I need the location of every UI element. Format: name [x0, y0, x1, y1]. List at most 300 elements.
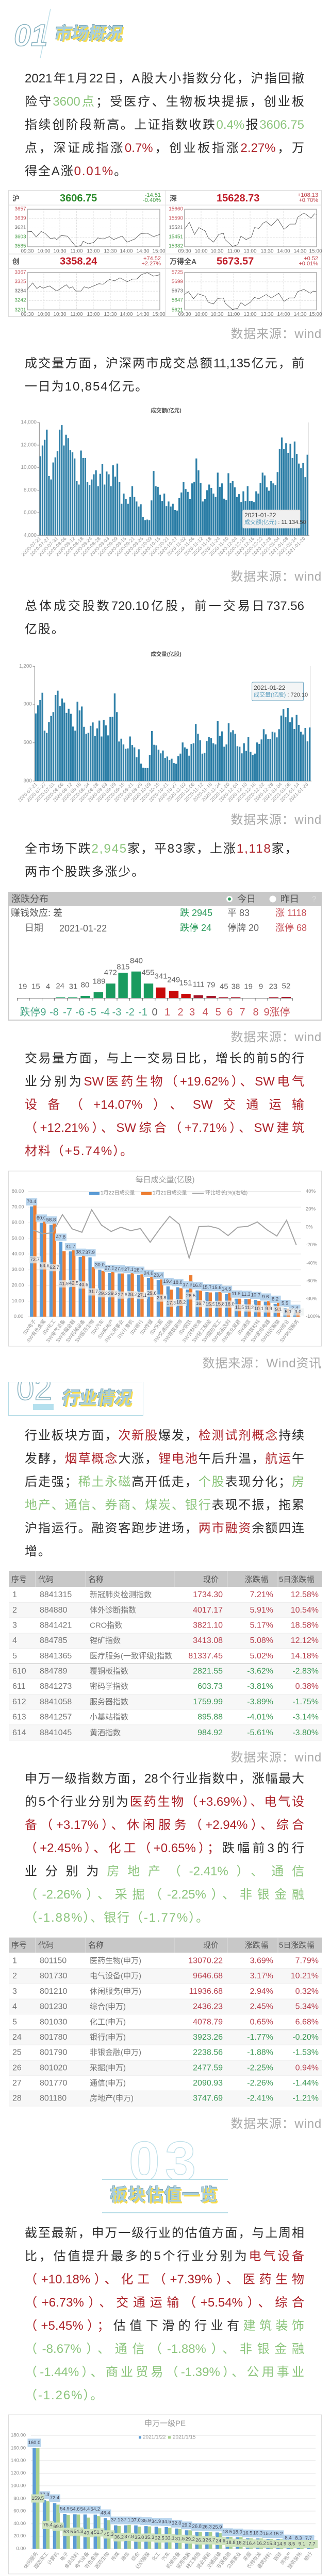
header: 深: 深	[170, 194, 177, 202]
source note: 数据来源：wind	[230, 327, 322, 341]
rows: 610	[12, 1667, 26, 1675]
category labels: 医药生物	[93, 2551, 111, 2570]
rows: 5.17%	[250, 1621, 273, 1630]
data labels: Jan 22: 58.8	[46, 1217, 56, 1223]
table header: 序号	[11, 1575, 27, 1584]
rows: 2477.59	[193, 2064, 223, 2072]
category labels: 综合	[130, 2551, 141, 2562]
histogram value labels: 79	[207, 981, 215, 989]
data labels: 2021/1/15: 26.3	[195, 2537, 205, 2543]
category labels: 机械设备	[164, 2551, 182, 2570]
chart: 沪 intraday: 11:00	[70, 248, 83, 255]
data labels: Jan 21: 31.7	[89, 1289, 98, 1295]
histogram value labels: 151	[179, 979, 192, 987]
data labels: Jan 21: 27.1	[137, 1293, 147, 1298]
table header: 序号	[11, 1941, 27, 1950]
category labels: SW国防军工	[201, 1318, 223, 1344]
category labels: SW采掘	[148, 1318, 164, 1336]
rows	[12, 1590, 319, 1737]
paragraph: market overview: 点，深证成指涨0.7%，创业板指涨2.27%，万	[25, 141, 304, 155]
paragraph: volume by sector: 交易量方面，与上一交易日比，增长的前5的行	[25, 1051, 304, 1065]
data labels: Jan 21: 11.5	[235, 1305, 244, 1311]
rows: 房地产(申万)	[90, 2094, 134, 2103]
rows: 801020	[40, 2064, 67, 2072]
table header: 代码	[38, 1941, 54, 1950]
date axis labels: 2021-01-20	[285, 536, 307, 557]
rows: 8841058	[40, 1698, 72, 1706]
y axis: 600	[23, 740, 32, 745]
table header: 名称	[88, 1941, 104, 1950]
header: 万得全A: +0.01%	[299, 261, 318, 267]
chart: 深 intraday: 15660	[169, 206, 183, 212]
rows: 611	[12, 1682, 26, 1691]
rows: 801730	[40, 1972, 67, 1980]
rows: 3923.26	[193, 2033, 223, 2042]
data labels: Jan 21: 3.0	[294, 1309, 302, 1315]
chart: 深 intraday: 15590	[169, 215, 183, 222]
bars	[40, 425, 307, 535]
rows: 8841365	[40, 1652, 72, 1660]
category labels: 通信	[120, 2551, 130, 2562]
histogram value labels: 52	[282, 982, 290, 990]
category labels: 建筑装饰	[286, 2551, 303, 2570]
category labels: 电气设备	[73, 2551, 91, 2570]
category labels: 家用电器	[175, 2551, 192, 2570]
histogram value labels: 45	[220, 982, 228, 991]
category labels: SW交通运输	[152, 1318, 174, 1344]
paragraph: share volume: 总体成交股数720.10亿股，前一交易日737.56	[25, 599, 304, 613]
header bar: ?	[312, 894, 316, 904]
rows: 4017.17	[193, 1606, 223, 1615]
header: 沪	[12, 192, 161, 204]
rows: 7.21%	[250, 1590, 273, 1599]
rows: 1734.30	[193, 1590, 223, 1599]
table header: 代码	[38, 1575, 54, 1584]
date axis labels: 2020-10-21	[148, 536, 170, 557]
chart: 万得全A intraday: 5673	[172, 289, 183, 294]
summary stats: 日期	[25, 923, 43, 933]
category labels: SW银行	[129, 1318, 145, 1336]
y axis: 14,000	[21, 419, 37, 426]
chart: 万得全A intraday: 5725	[172, 270, 183, 275]
chart: 沪 intraday: 13:30	[104, 248, 117, 255]
chart: SW level-1 PE	[8, 2414, 322, 2574]
header bar: 今日	[237, 894, 256, 904]
source note: 数据来源：wind	[230, 2117, 322, 2131]
chart title: 成交量(亿股)	[151, 651, 182, 657]
chart: 创 intraday: 3325	[14, 279, 26, 284]
date axis labels: 2020-10-15	[140, 536, 162, 557]
histogram value labels: 19	[244, 982, 253, 991]
rows: 613	[12, 1713, 26, 1722]
rows: 0.32%	[295, 1987, 319, 1996]
table: SW level-1 ranking	[9, 1937, 322, 2106]
rows: 0.38%	[295, 1682, 319, 1691]
rows: -1.44%	[292, 2079, 319, 2088]
category labels: SW非银金融	[55, 1318, 77, 1344]
histogram value labels	[19, 956, 290, 991]
data labels: 2021/1/22: 37.1	[111, 2517, 120, 2523]
data labels: Jan 22: 10.7	[251, 1293, 260, 1298]
category labels: 休闲服务	[22, 2551, 40, 2570]
date axis labels: 2020-12-16	[234, 536, 256, 557]
rows: 黄酒指数	[90, 1728, 121, 1737]
paragraph: valuation: （-1.44%）、商业贸易（-1.39%）、公用事业	[25, 2365, 304, 2379]
data labels: Jan 21: 9.9	[266, 1306, 272, 1312]
rows: -2.83%	[292, 1667, 319, 1675]
category labels: SW医药生物	[74, 1318, 96, 1344]
paragraph: turnover: 成交量方面，沪深两市成交总额11,135亿元，前	[25, 357, 304, 370]
paragraph: SW level-1 index	[25, 1771, 304, 1925]
date axis labels: 2020-12-22	[242, 536, 264, 557]
growth line	[33, 1210, 296, 1258]
date axis labels: 2020-11-02	[166, 536, 187, 557]
category labels: SW传媒	[139, 1318, 155, 1336]
rows: 采掘(申万)	[90, 2064, 126, 2072]
data labels: Jan 21: 15.8	[215, 1301, 225, 1307]
data labels: Jan 21: 29.6	[147, 1291, 157, 1296]
table header	[9, 1571, 322, 1587]
date axis labels: 2020-08-12	[52, 782, 74, 803]
rows: 5.02%	[250, 1652, 273, 1660]
date axis labels: 2020-11-02	[166, 782, 187, 803]
rows: 综合(申万)	[90, 2002, 126, 2011]
chart: 沪 intraday: 14:00	[120, 248, 133, 255]
chart: turnover bars	[21, 407, 309, 557]
data labels: Jan 21: 16.7	[196, 1301, 205, 1307]
category labels: 钢铁	[272, 2551, 284, 2562]
category labels: 食品饮料	[63, 2551, 80, 2570]
rows: 锂矿指数	[90, 1636, 121, 1645]
gridlines and axis: 180.00	[11, 2433, 26, 2438]
date axis labels: 2020-09-15	[104, 782, 126, 803]
data labels: Jan 21: 23.8	[157, 1295, 167, 1301]
rows: 密码学指数	[90, 1682, 128, 1691]
summary stats: 赚钱效应: 差	[11, 908, 62, 918]
rows: 13070.22	[188, 1957, 223, 1965]
rows: 非银金融(申万)	[90, 2048, 141, 2057]
chart: 深 intraday: 15382	[169, 243, 183, 249]
chart: 沪 intraday: 3585	[14, 243, 26, 249]
data labels: Jan 21: 27.6	[118, 1292, 127, 1298]
data labels: 2021/1/15	[31, 2495, 318, 2548]
histogram value labels: 815	[117, 962, 129, 972]
paragraph: valuation: （-8.67%）、通信（-1.88%）、非银金融	[25, 2342, 304, 2355]
chart: 万得全A intraday: 5699	[172, 279, 183, 284]
date axis labels: 2020-11-18	[191, 536, 213, 557]
data labels: 2021/1/22: 54.2	[91, 2506, 100, 2512]
date axis labels: 2020-07-21	[21, 536, 42, 557]
chart: 创 intraday: 3367	[14, 270, 26, 275]
date axis labels: 2020-11-30	[209, 782, 231, 803]
data labels: 2021/1/15: 7.7	[308, 2541, 316, 2547]
data labels: 2021/1/22: 16.3	[253, 2531, 262, 2536]
rows: -0.20%	[292, 2033, 319, 2042]
data labels: 2021/1/15: 49.4	[84, 2530, 93, 2536]
data labels: 2021/1/22: 54.9	[60, 2506, 70, 2512]
paragraph: SW level-1 index: （-1.88%）、银行（-1.77%）。	[25, 1910, 209, 1925]
chart: 沪 intraday: 15:00	[152, 248, 166, 255]
table header	[9, 1938, 322, 1953]
histogram value labels: 189	[92, 977, 106, 986]
date axis labels: 2020-11-12	[183, 782, 205, 803]
rows: 26	[12, 2064, 22, 2072]
category labels: SW建筑材料	[240, 1318, 262, 1344]
category labels: 房地产	[279, 2551, 293, 2566]
pointer line	[308, 422, 309, 535]
data labels: 2021/1/15: 9.1	[299, 2541, 305, 2547]
date axis labels: 2020-11-24	[201, 782, 222, 803]
table header: 涨跌幅	[245, 1941, 268, 1950]
category labels: SW钢铁	[177, 1318, 193, 1336]
date axis labels: 2020-10-27	[157, 782, 178, 803]
rows: 27	[12, 2079, 22, 2088]
data labels: 2021/1/22: 26.3	[202, 2524, 212, 2530]
legend: 2021/1/15	[173, 2435, 196, 2440]
data labels: 2021/1/15: 15.3	[267, 2541, 276, 2547]
paragraph: sector overview: 地产、通信、券商、煤炭、银行表现不振，拖累	[25, 1498, 304, 1512]
paragraph: valuation	[25, 2226, 304, 2402]
category labels: 公用事业	[225, 2551, 242, 2570]
histogram bars	[18, 972, 292, 1001]
category labels: SW公用事业	[103, 1318, 125, 1344]
chart: 创 intraday: 10:30	[53, 312, 67, 317]
data labels: 2021/1/22: 160.0	[28, 2440, 40, 2446]
header: 沪: -0.40%	[143, 197, 161, 204]
date axis labels: 2020-08-28	[80, 536, 102, 557]
legend: 环比增长(%)(右轴)	[205, 1189, 248, 1196]
paragraph: market overview: 险守3600点；受医疗、生物板块提振，创业板	[25, 95, 304, 108]
histogram axis labels: -2	[125, 1007, 135, 1018]
paragraph: market overview	[25, 71, 304, 178]
gridlines and axes: -80%	[306, 1296, 318, 1301]
paragraph: SW level-1 index: （+2.45%）、化工（+0.65%）；跌幅前3的行	[25, 1841, 304, 1855]
data labels: 2021/1/15: 45.3	[104, 2532, 113, 2537]
rows: 12.58%	[291, 1590, 319, 1599]
data labels: 2021/1/22: 8.3	[295, 2535, 302, 2541]
chart: 万得全A intraday: 11:00	[227, 312, 240, 317]
rows: 通信(申万)	[90, 2079, 126, 2088]
rows: -1.53%	[292, 2048, 319, 2057]
panel: advance/decline distribution	[8, 892, 322, 1021]
histogram value labels: 23	[269, 982, 277, 991]
data labels: 2021/1/22: 34.9	[152, 2519, 161, 2524]
date axis labels: 2021-01-20	[288, 782, 309, 803]
rows: 2	[12, 1972, 17, 1980]
data labels: Jan 21: 10.1	[254, 1306, 264, 1312]
summary stats: 跌停 24	[180, 923, 211, 933]
rows: 5.91%	[250, 1606, 273, 1615]
histogram axis labels: -5	[87, 1007, 96, 1018]
tooltip	[252, 682, 308, 701]
data labels: 2021/1/15: 32.5	[155, 2536, 164, 2541]
category labels	[22, 1318, 301, 1344]
date axis labels: 2020-11-06	[174, 536, 196, 557]
rows: -1.21%	[292, 2094, 319, 2103]
summary stats: 涨停 68	[275, 923, 307, 933]
date axis labels: 2020-08-18	[61, 782, 82, 803]
data labels: Jan 22: 5.5	[282, 1300, 288, 1307]
date axis labels: 2020-11-24	[200, 536, 221, 557]
rows: 5.34%	[295, 2002, 319, 2011]
header: 深	[170, 192, 318, 204]
accent block	[33, 1404, 54, 1410]
data labels: Jan 22: 8.2	[272, 1296, 278, 1302]
chart title: 每日成交量(亿股)	[135, 1175, 195, 1184]
chart: 沪 intraday: 09:30	[21, 248, 34, 255]
date axis labels: 2020-08-28	[78, 782, 100, 803]
gridlines and axes: 50.00	[12, 1235, 24, 1242]
data labels: 2021/1/22: 25.9	[212, 2524, 222, 2530]
date axis labels: 2020-08-18	[63, 536, 85, 557]
histogram value labels: 840	[130, 956, 143, 965]
chart: 沪 intraday: 3621	[14, 225, 26, 231]
data labels: Jan 21: 26.5	[186, 1293, 195, 1299]
rows: 8841273	[40, 1682, 72, 1691]
rows: -5.61%	[247, 1728, 273, 1737]
paragraph: share volume: 亿股。	[25, 622, 65, 636]
data labels: Jan 21: 16.0	[225, 1301, 235, 1307]
header: 创: +2.27%	[141, 261, 161, 267]
tooltip: 成交额(亿元) : 11,134.50	[244, 518, 306, 526]
heading 行业情况: 行业情况	[60, 1388, 134, 1408]
data labels: 2021/1/22: 26.8	[192, 2524, 202, 2530]
paragraph: valuation: 截至最新，申万一级行业的估值方面，与上周相	[25, 2226, 304, 2240]
data labels: Jan 21: 11.2	[245, 1305, 254, 1311]
rows: 8841421	[40, 1621, 72, 1630]
tooltip: 成交量(亿股) : 720.10	[254, 691, 308, 698]
rows: 5	[12, 2018, 17, 2027]
data labels: 2021/1/22: 16.5	[243, 2530, 252, 2536]
data labels: 2021/1/15: 51.7	[94, 2530, 104, 2535]
chart: 深 intraday: 15521	[169, 225, 183, 231]
bars	[36, 691, 310, 781]
gridlines and axes: 20.00	[12, 1283, 24, 1288]
date axis labels: 2020-07-21	[17, 782, 39, 803]
paragraph: sector overview: 增。	[25, 1545, 52, 1558]
category labels: 纺织服装	[134, 2551, 152, 2570]
chart: 创 intraday: 10:00	[37, 312, 51, 317]
rows: 614	[12, 1728, 26, 1737]
gridlines and axes	[12, 1189, 320, 1319]
y axis	[21, 419, 309, 538]
paragraph: market overview: 2021年1月22日，A股大小指数分化，沪指回撤	[25, 71, 304, 86]
histogram value labels: 111	[193, 980, 205, 989]
data labels: Jan 22: 11.5	[232, 1291, 241, 1297]
header: 沪: 3606.75	[60, 193, 97, 204]
category labels: SW综合	[275, 1318, 291, 1336]
category labels	[22, 2551, 314, 2570]
data labels: 2021/1/22: 8.4	[285, 2535, 292, 2541]
gridlines and axis: 20.00	[13, 2533, 26, 2539]
rows: 801790	[40, 2048, 67, 2057]
data labels: 2021/1/15: 69.9	[53, 2524, 63, 2530]
chart: 创 intraday	[14, 270, 166, 317]
histogram axis labels: 跌停9	[20, 1006, 46, 1018]
header: 创	[12, 256, 161, 267]
histogram axis labels: -6	[75, 1007, 85, 1018]
rows: 7.79%	[295, 1957, 319, 1965]
category labels: SW纺织服装	[259, 1318, 282, 1344]
data labels: Jan 21: 42.5	[69, 1281, 78, 1286]
date axis labels	[17, 782, 309, 803]
y axis	[19, 664, 311, 784]
date axis labels	[21, 536, 307, 557]
category labels: SW商业贸易	[220, 1318, 242, 1344]
paragraph: breadth: 两市个股跌多涨少。	[25, 865, 145, 879]
rows: 1	[12, 1590, 17, 1599]
rows: 801030	[40, 2018, 67, 2027]
data labels: Jan 22: 11.3	[241, 1292, 251, 1297]
source note: 数据来源：Wind资讯	[203, 1357, 322, 1370]
data labels: 2021/1/15: 24.6	[216, 2538, 225, 2544]
histogram value labels: 249	[167, 976, 180, 984]
y axis: 6,000	[24, 510, 37, 515]
date axis labels: 2020-08-12	[55, 536, 76, 557]
date axis labels: 2020-12-16	[236, 782, 257, 803]
category labels: 交通运输	[205, 2551, 223, 2570]
chart: 创 intraday: 14:00	[120, 312, 133, 317]
paragraph: sector overview: 发酵，烟草概念大涨，锂电池午后升温，航运午	[25, 1452, 304, 1466]
chart: 深 intraday: 11:00	[227, 248, 240, 255]
paragraph: SW level-1 index: 备（+3.17%）、休闲服务（+2.94%）、综合	[25, 1818, 304, 1832]
rows: 24	[12, 2033, 22, 2042]
rows: -4.01%	[247, 1713, 273, 1722]
histogram axis labels: -8	[50, 1007, 59, 1018]
category labels: SW轻工制造	[191, 1318, 213, 1344]
rows: 801180	[40, 2094, 67, 2103]
date axis labels: 2021-01-04	[259, 536, 281, 557]
data labels: 2021/1/15: 8.5	[288, 2541, 295, 2547]
rows: 2.94%	[250, 1987, 273, 1996]
y axis: 900	[23, 702, 32, 707]
gridlines and axes: 30.00	[12, 1267, 24, 1273]
data labels: Jan 22: 41.7	[66, 1244, 75, 1249]
histogram value labels: 38	[232, 982, 240, 991]
table header: 现价	[203, 1575, 219, 1584]
chart: 创 intraday: 3201	[14, 307, 26, 313]
paragraph: volume by sector	[25, 1051, 304, 1158]
summary stats: 涨 1118	[275, 908, 306, 918]
paragraph: SW level-1 index: （-2.26%）、采掘（-2.25%）、非银金融	[25, 1888, 304, 1901]
chart: 创 intraday: 3242	[14, 298, 26, 303]
category labels: 有色金属	[83, 2551, 100, 2570]
histogram value labels: 80	[81, 981, 89, 989]
chart: 万得全A intraday: 10:00	[194, 312, 208, 317]
paragraph: SW level-1 index: 的5个行业分别为医药生物（+3.69%）、电气设	[25, 1795, 304, 1808]
histogram value labels: 455	[141, 969, 155, 977]
chart: 深 intraday: 10:30	[210, 248, 224, 255]
rows: 银行(申万)	[90, 2033, 126, 2042]
rows: 28	[12, 2094, 22, 2103]
header: 深: 15628.73	[217, 193, 259, 204]
date axis labels: 2020-12-04	[217, 536, 239, 557]
category labels: 银行	[303, 2551, 314, 2562]
header bar: 昨日	[280, 894, 299, 904]
category labels: SW计算机	[116, 1318, 135, 1340]
table: concept index ranking	[9, 1571, 322, 1740]
rows: 2238.56	[193, 2048, 223, 2057]
category labels: 采掘	[242, 2551, 253, 2562]
category labels: 轻工制造	[185, 2551, 202, 2570]
histogram axis labels: 2	[177, 1007, 184, 1018]
rows: 4078.79	[193, 2018, 223, 2027]
data labels: Jan 22: 26.7	[134, 1267, 143, 1273]
rows: 884789	[40, 1667, 67, 1675]
chart: 万得全A intraday	[172, 270, 322, 317]
date axis labels: 2021-01-08	[270, 782, 292, 803]
chart: 万得全A intraday: 13:00	[243, 312, 257, 317]
